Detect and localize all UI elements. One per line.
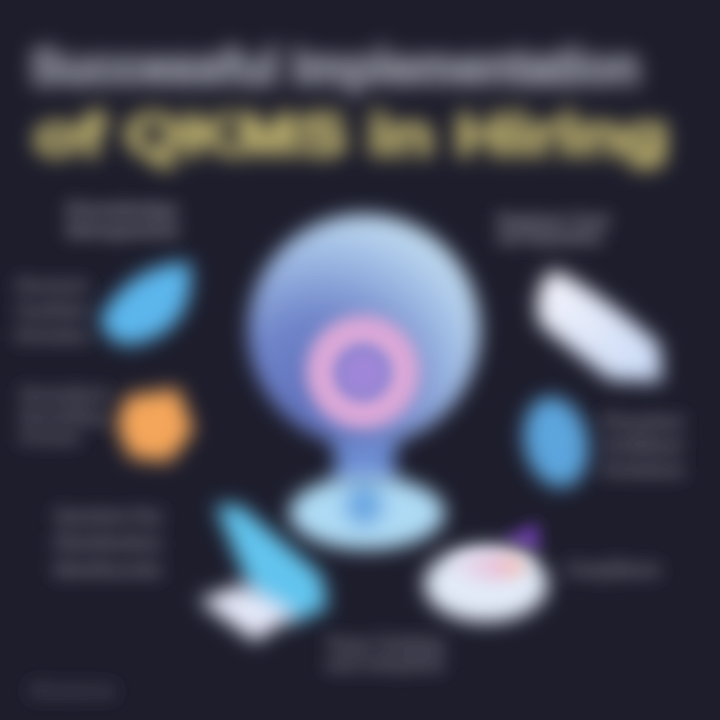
icon: laptop with blue screen [198, 505, 328, 642]
label: left middle: Streamlined [20, 385, 108, 404]
label: bottom centre: and Adoption [326, 654, 444, 674]
label: top left: Knowledge [66, 200, 178, 219]
label: right middle: Decisions [602, 460, 684, 480]
icon: blue droplet right [515, 390, 597, 494]
globe sphere [248, 214, 480, 446]
label: left upper [16, 276, 89, 345]
label: left middle: Recruiting [20, 407, 105, 426]
label: right lower: Compliance [566, 559, 660, 581]
label: left middle: Process [20, 428, 80, 447]
icon: pie dish [424, 522, 548, 622]
label: left middle [20, 385, 108, 447]
label: top left [66, 200, 178, 240]
label: top right: and Reputation [497, 228, 602, 247]
central globe illustration [248, 214, 480, 550]
stand neck [335, 425, 395, 490]
title line 2: of QKMS in Hiring [34, 103, 669, 168]
label: right middle: Faster [602, 412, 684, 432]
label: right middle: Offer [602, 436, 684, 456]
label: left lower: Methods [54, 560, 162, 580]
label: bottom centre: Team Training [326, 634, 444, 654]
icon: white document pill [537, 270, 662, 382]
label: left upper: Data [16, 326, 89, 345]
title [30, 39, 669, 168]
label: top right: Employer Trust [497, 211, 609, 230]
target centre [337, 347, 389, 399]
label: left lower [54, 506, 162, 580]
footer note: Source [30, 680, 115, 702]
label: top right [497, 211, 609, 247]
label: left upper: Secure [16, 276, 88, 295]
label: right middle [602, 412, 684, 480]
icon: orange badge [116, 388, 194, 462]
label: left lower: Quantum Key [54, 506, 162, 526]
label: left upper: Candidate [16, 301, 88, 320]
title line 1: Successful Implementation [30, 39, 640, 95]
label: left lower: Distribution [54, 533, 162, 553]
stand base [289, 476, 445, 550]
target ring [322, 331, 404, 413]
label: top left: Management [66, 221, 178, 240]
icon: blue shield left [100, 262, 191, 345]
label: bottom centre [326, 634, 444, 674]
